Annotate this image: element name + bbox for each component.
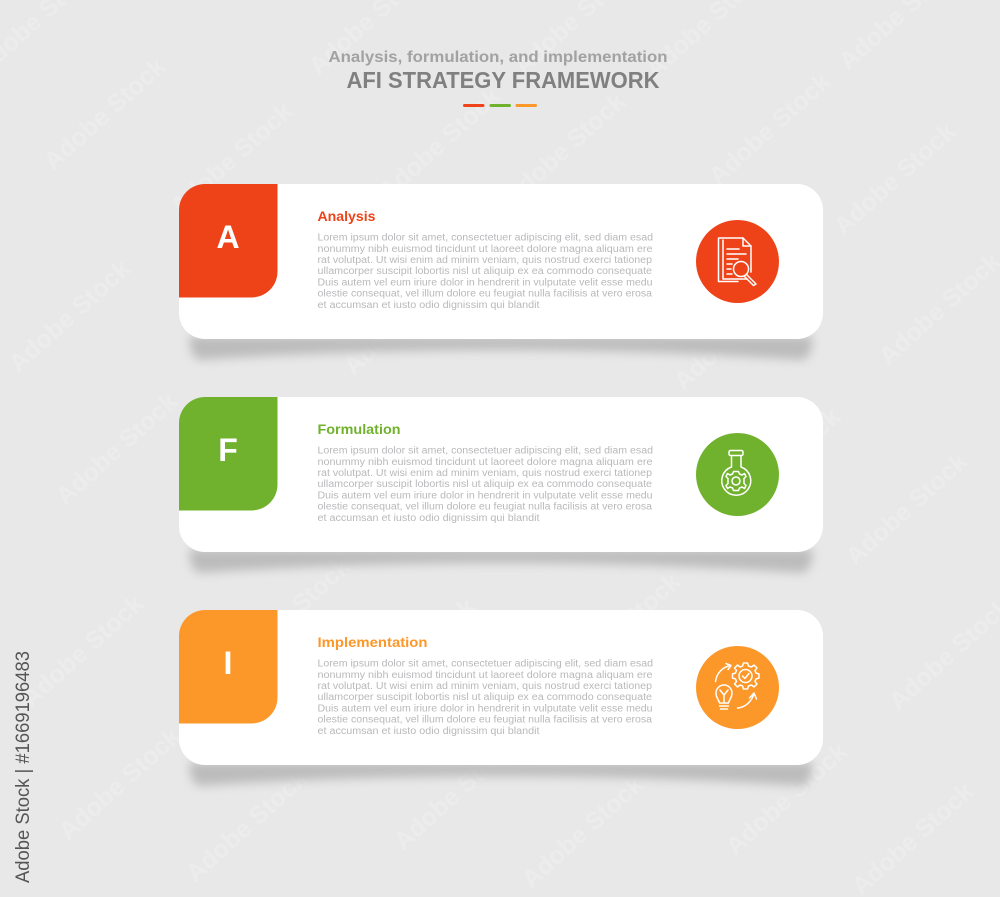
stock id caption: Adobe Stock | #1669196483 (12, 651, 34, 883)
watermark: Adobe Stock (51, 387, 183, 511)
watermark: Adobe Stock (841, 447, 973, 571)
watermark: Adobe Stock (384, 397, 516, 521)
watermark: Adobe Stock (166, 97, 298, 221)
body text: et accumsan et iusto odio dignissim qui blandit (318, 726, 540, 737)
body text: Duis autem vel eum iriure dolor in hendrerit in vulputate velit esse medu (318, 278, 652, 288)
body text: olestie consequat, vel illum dolore eu feugiat nulla facilisis at vero erosa (318, 289, 653, 300)
body text (318, 658, 653, 737)
body text: olestie consequat, vel illum dolore eu feugiat nulla facilisis at vero erosa (318, 502, 653, 513)
body text (318, 232, 653, 311)
watermark: Adobe Stock (721, 737, 853, 861)
letter: A (216, 219, 240, 255)
main heading: AFI STRATEGY FRAMEWORK (346, 67, 660, 93)
watermark: Adobe Stock (39, 52, 171, 176)
card (179, 397, 823, 552)
subtitle: Analysis, formulation, and implementation (328, 49, 668, 66)
watermark: Adobe Stock (54, 722, 186, 846)
body text: Duis autem vel eum iriure dolor in hendrerit in vulputate velit esse medu (318, 490, 652, 502)
watermark: Adobe Stock (389, 732, 521, 856)
body text (318, 446, 653, 524)
body text: rat volutpat. Ut wisi enim ad minim veniam, quis nostrud exerci tationep (318, 468, 652, 479)
watermark: Adobe Stock (4, 254, 136, 378)
body text: ullamcorper suscipit lobortis nisl ut aliquip ex ea commodo consequate (318, 479, 652, 490)
watermark: Adobe Stock (179, 422, 311, 546)
body text: et accumsan et iusto odio dignissim qui blandit (318, 513, 540, 524)
watermark: Adobe Stock (349, 592, 481, 716)
watermark: Adobe Stock (499, 87, 631, 211)
watermark: Adobe Stock (374, 82, 506, 206)
letter tab (179, 610, 278, 724)
watermark: Adobe Stock (847, 777, 979, 897)
card shadow (190, 762, 812, 786)
heading: Implementation (318, 635, 428, 650)
watermark: Adobe Stock (181, 764, 313, 888)
watermark: Adobe Stock (17, 589, 149, 713)
body text: Lorem ipsum dolor sit amet, consectetuer adipiscing elit, sed diam esad (318, 658, 653, 670)
body text: Lorem ipsum dolor sit amet, consectetuer adipiscing elit, sed diam esad (318, 232, 653, 244)
body text: rat volutpat. Ut wisi enim ad minim veniam, quis nostrud exerci tationep (318, 255, 652, 266)
watermark: Adobe Stock (517, 770, 649, 894)
title block (328, 49, 668, 107)
body text: olestie consequat, vel illum dolore eu feugiat nulla facilisis at vero erosa (318, 715, 653, 726)
card (179, 184, 823, 339)
heading: Formulation (318, 422, 400, 437)
body text: rat volutpat. Ut wisi enim ad minim veniam, quis nostrud exerci tationep (318, 681, 652, 692)
icon circle: idea to gear cycle (696, 646, 779, 729)
body text: nonummy nibh euismod tincidunt ut laoreet dolore magna aliquam ere (318, 670, 652, 681)
watermark: Adobe Stock (339, 257, 471, 381)
body text: Lorem ipsum dolor sit amet, consectetuer adipiscing elit, sed diam esad (318, 446, 653, 456)
watermark: Adobe Stock (224, 552, 356, 676)
body text: ullamcorper suscipit lobortis nisl ut aliquip ex ea commodo consequate (318, 692, 652, 703)
body text: Duis autem vel eum iriure dolor in hendrerit in vulputate velit esse medu (318, 704, 652, 714)
panel: implementation (179, 610, 823, 786)
watermark: Adobe Stock (554, 567, 686, 691)
card shadow (190, 336, 812, 360)
heading: Analysis (318, 209, 376, 224)
icon circle: document search (696, 220, 779, 303)
card (179, 610, 823, 765)
watermark: Adobe Stock (541, 232, 673, 356)
watermark: Adobe Stock (704, 67, 836, 191)
watermark: Adobe Stock (679, 602, 811, 726)
panel: formulation (179, 397, 823, 573)
colour dashes (463, 104, 537, 107)
body text: et accumsan et iusto odio dignissim qui blandit (318, 300, 540, 311)
body text: nonummy nibh euismod tincidunt ut laoreet dolore magna aliquam ere (318, 244, 652, 255)
watermark: Adobe Stock (669, 272, 801, 396)
letter tab (179, 397, 278, 510)
body text: ullamcorper suscipit lobortis nisl ut aliquip ex ea commodo consequate (318, 266, 652, 277)
body text: nonummy nibh euismod tincidunt ut laoreet dolore magna aliquam ere (318, 457, 652, 468)
letter: F (218, 432, 238, 468)
panel: analysis (179, 184, 823, 360)
watermark: Adobe Stock (509, 432, 641, 556)
icon circle: flask with gear (696, 433, 779, 516)
letter: I (224, 645, 232, 681)
watermark: Adobe Stock (214, 222, 346, 346)
watermark: Adobe Stock (829, 117, 961, 241)
watermark: Adobe Stock (714, 402, 846, 526)
card shadow (190, 549, 812, 573)
letter tab (179, 184, 278, 298)
